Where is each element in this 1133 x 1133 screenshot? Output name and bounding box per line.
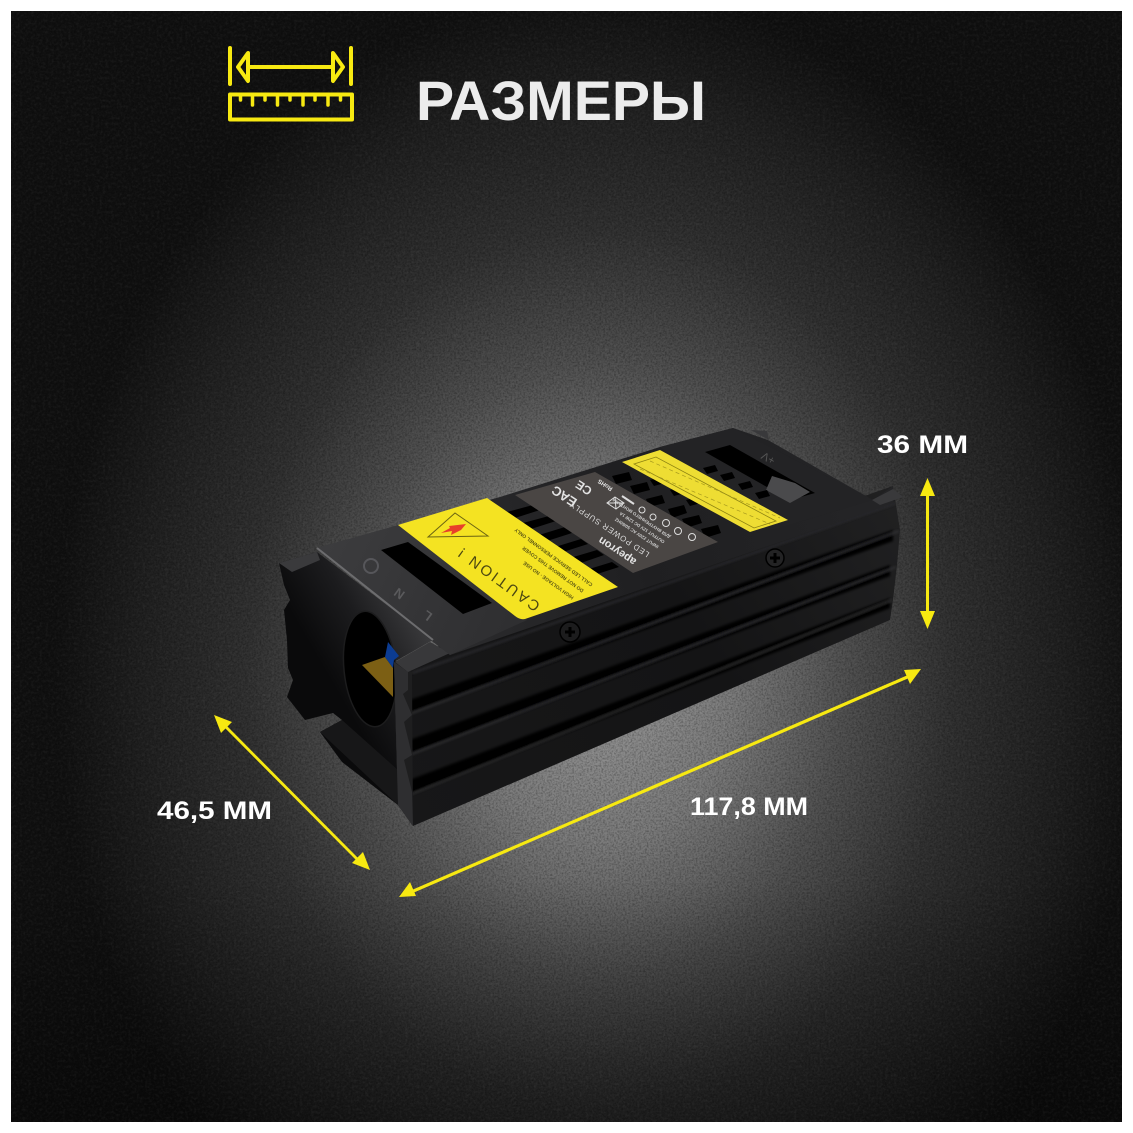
front end face <box>279 552 433 805</box>
terminal slot <box>381 542 492 614</box>
label: specifications: INPUT 220V AC 50/60HZ <box>614 517 660 549</box>
terminal marks: N <box>391 585 408 602</box>
label: specifications: CE <box>573 477 595 498</box>
vent slots <box>507 465 770 575</box>
label: specifications <box>515 472 718 573</box>
icon: ruler with dimension arrow <box>230 48 352 120</box>
top end plate right <box>660 428 903 530</box>
label: specifications: LED POWER SUPPLY <box>568 499 651 559</box>
terminal marks: L <box>420 607 435 624</box>
top edge bevel at front corner <box>395 642 450 672</box>
arrow: height <box>920 478 935 629</box>
top surface <box>317 428 893 655</box>
top end plate left <box>317 525 527 655</box>
screw left <box>560 622 580 642</box>
dimension label: width: 46,5 ММ <box>157 797 272 825</box>
finned side face <box>394 486 900 826</box>
top end plate right: +V <box>759 449 777 466</box>
screw right <box>766 549 784 567</box>
arrow: length <box>399 669 921 897</box>
label: specifications: ЕАС <box>548 482 580 510</box>
label: specifications: ДЛЯ ВНУТРЕННЕГО МОНТАЖА <box>610 497 672 539</box>
product: LED power supply <box>279 428 903 826</box>
label: caution: CALL LED SERVICE PERSONNEL ONLY <box>513 526 594 587</box>
dimension label: height: 36 ММ <box>877 431 968 459</box>
label: caution <box>398 498 618 619</box>
label: specifications: OUTPUT 12V DC 12W 1A <box>618 510 666 544</box>
label: specifications: apeyron <box>596 534 639 568</box>
label: caution: DO NOT REMOVE THIS COVER <box>521 544 585 593</box>
terminal marks <box>364 559 435 624</box>
cable opening <box>338 609 402 729</box>
label: wiring <box>622 450 788 532</box>
label: caution: CAUTION ! <box>453 542 543 615</box>
warning triangle <box>428 513 488 537</box>
label: specifications: RoHS <box>597 477 614 491</box>
arrow: width <box>214 715 370 870</box>
title: РАЗМЕРЫ <box>416 69 706 132</box>
dimension label: length: 117,8 ММ <box>690 793 808 821</box>
label: caution: HIGH VOLTAGE · NO USE <box>522 559 575 600</box>
